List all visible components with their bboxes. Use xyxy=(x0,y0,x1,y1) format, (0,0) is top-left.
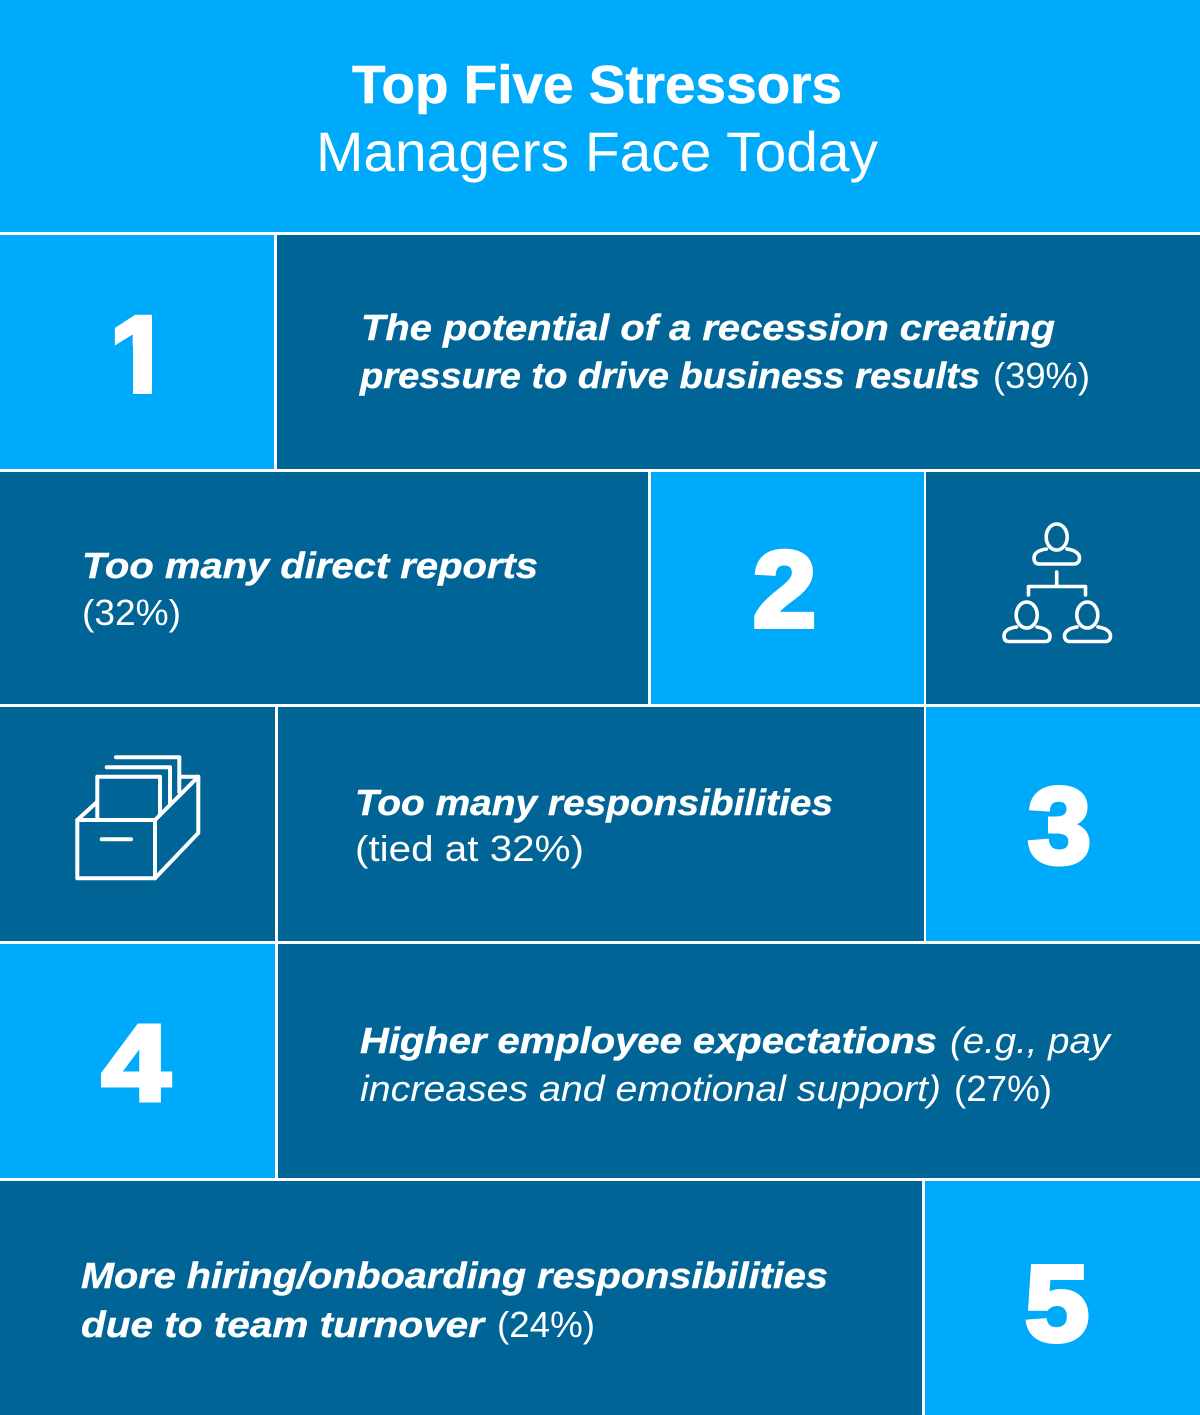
stressor 5 text: More hiring/onboarding responsibilities xyxy=(81,1255,828,1296)
stressor 4 text: (27%) xyxy=(954,1068,1052,1109)
title panel xyxy=(0,0,1200,232)
stressor 2 text: Too many direct reports xyxy=(82,545,538,586)
panel: stressor 2 xyxy=(0,472,1200,704)
panel: stressor 1 xyxy=(0,235,1200,469)
stressor 2 text xyxy=(82,545,538,633)
panel: stressor 5 xyxy=(0,1181,1200,1415)
stressor 5 text xyxy=(81,1255,828,1345)
stressor 1 text: pressure to drive business results xyxy=(359,355,980,396)
stressor 1 text: The potential of a recession creating xyxy=(361,307,1055,348)
stressor 3 text: (tied at 32%) xyxy=(355,828,584,869)
stressor 5 text: (24%) xyxy=(497,1304,595,1345)
stressor 4 text: (e.g., pay xyxy=(950,1020,1112,1061)
stressor 2 text: (32%) xyxy=(82,592,181,633)
title: bold line: Top Five Stressors xyxy=(352,55,842,115)
icon: file box xyxy=(77,757,198,878)
stressor 5 text: due to team turnover xyxy=(81,1304,486,1345)
stressor 3 text xyxy=(355,782,833,869)
stressor 4 text xyxy=(360,1020,1112,1109)
number 1: 1 xyxy=(110,294,170,414)
number 4: 4 xyxy=(102,1002,170,1123)
stressor 1 text xyxy=(359,307,1090,396)
stressor 1 text: (39%) xyxy=(993,355,1090,396)
stressor 4 text: increases and emotional support) xyxy=(360,1068,941,1109)
title: regular line: Managers Face Today xyxy=(316,120,878,183)
panel: stressor 4 xyxy=(0,944,1200,1178)
number 5: 5 xyxy=(1025,1242,1089,1364)
stressor 4 text: Higher employee expectations xyxy=(360,1020,937,1061)
stressor 3 text: Too many responsibilities xyxy=(355,782,833,823)
panel: stressor 3 xyxy=(0,707,1200,941)
number 3: 3 xyxy=(1028,765,1091,886)
number 2: 2 xyxy=(753,528,816,650)
icon: org chart xyxy=(1004,524,1110,642)
